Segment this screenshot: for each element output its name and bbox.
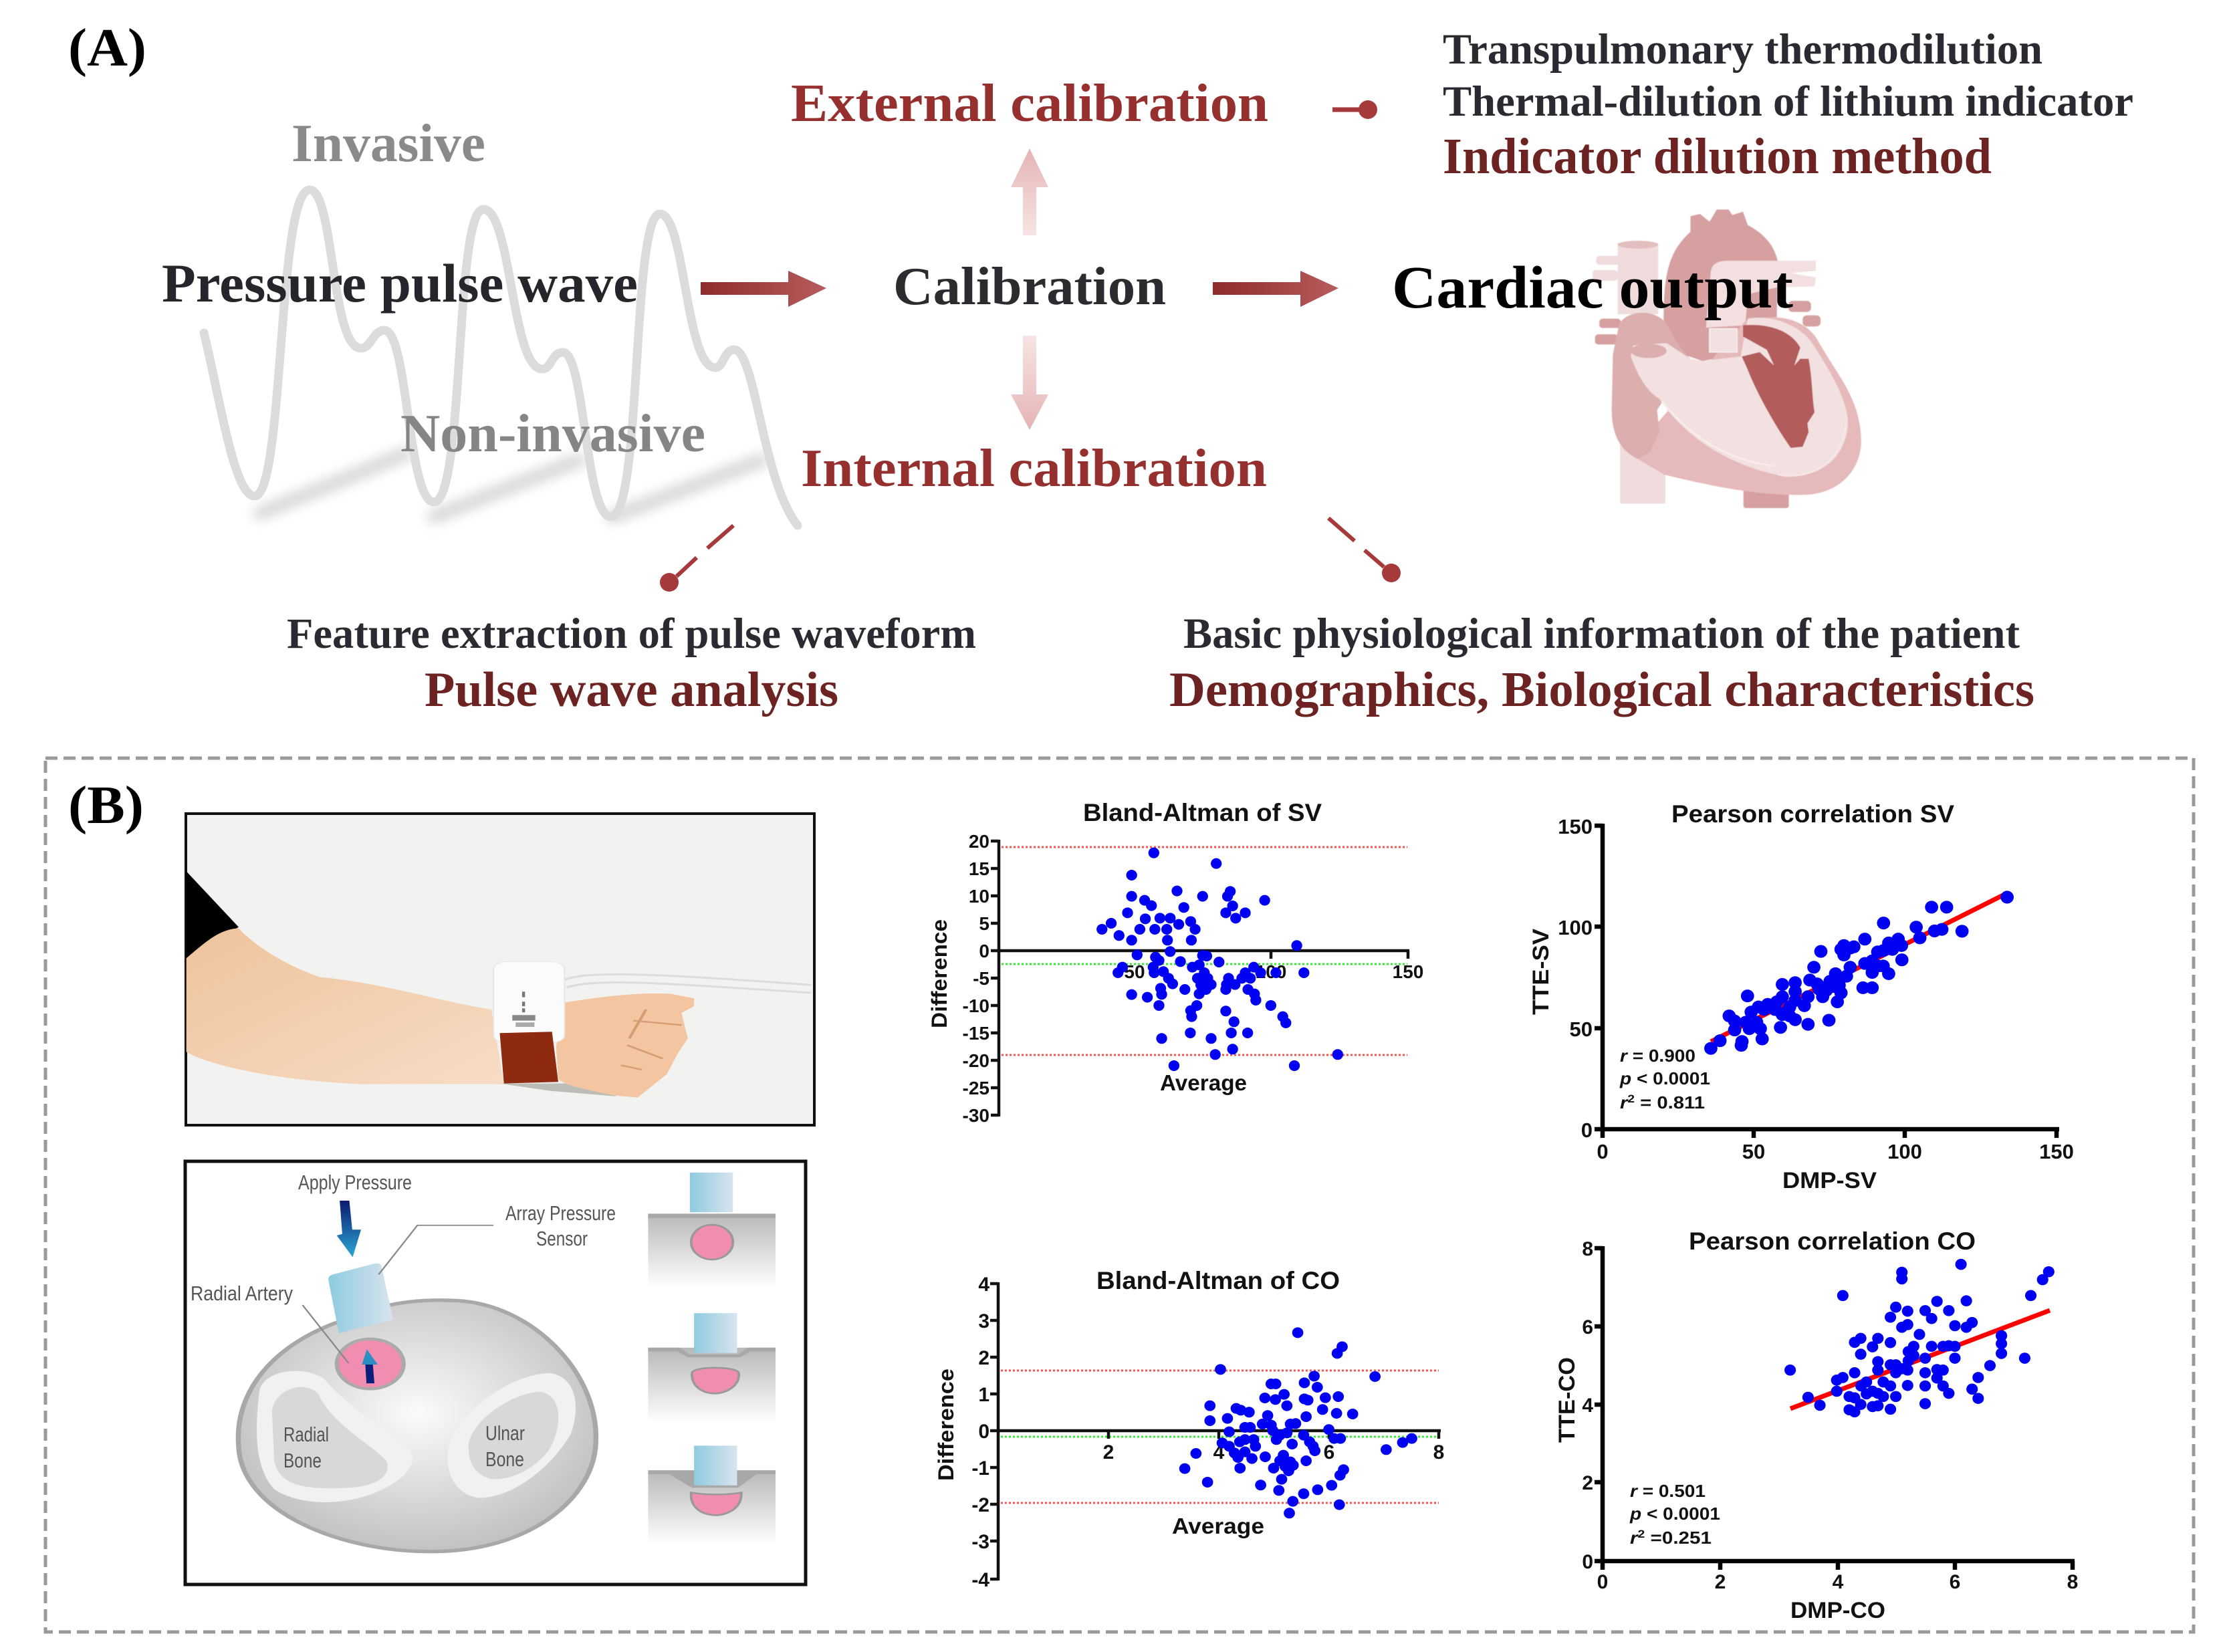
chart: Pearson correlation SV xyxy=(1528,800,2074,1193)
statistics annotation xyxy=(1629,1481,1720,1548)
x axis title: DMP-CO xyxy=(1790,1598,1885,1623)
statistics annotation: p < 0.0001 xyxy=(1629,1504,1720,1524)
heading: cardiac output: Cardiac output xyxy=(1392,255,1793,321)
x axis title: DMP-SV xyxy=(1782,1168,1877,1193)
statistics annotation: r = 0.501 xyxy=(1630,1481,1706,1501)
regression line xyxy=(1711,895,2004,1042)
y axis with ticks: 5 xyxy=(979,913,989,934)
axes with ticks: 4 xyxy=(1582,1395,1593,1417)
y axis title: Difference xyxy=(934,1369,958,1481)
x axis with ticks: 8 xyxy=(1433,1441,1444,1463)
y axis title: Difference xyxy=(927,919,951,1028)
text: thermal-dilution of lithium indicator: Thermal-dilution of lithium indicator xyxy=(1443,78,2133,126)
x axis with ticks: 2 xyxy=(1103,1441,1114,1463)
arrow: up to external calibration xyxy=(1011,148,1048,235)
connector: internal calibration to pulse wave analysis xyxy=(660,525,733,592)
labels: ulnar: Ulnar xyxy=(485,1421,525,1445)
axes with ticks: 100 xyxy=(1887,1140,1922,1163)
y axis with ticks xyxy=(971,1274,998,1591)
y axis with ticks: 0 xyxy=(979,941,989,961)
axes with ticks xyxy=(1558,815,2074,1163)
chart: Bland-Altman of SV xyxy=(927,799,1423,1126)
compression state 1 xyxy=(648,1173,776,1288)
axes with ticks: 50 xyxy=(1570,1018,1593,1041)
y axis with ticks: -25 xyxy=(963,1078,989,1098)
y axis with ticks: -20 xyxy=(963,1050,989,1071)
compression state 2 xyxy=(648,1313,776,1423)
label: pressure pulse wave: Pressure pulse wave xyxy=(162,253,638,314)
statistics annotation: r xyxy=(1630,1528,1639,1548)
y axis title: TTE-CO xyxy=(1554,1357,1580,1443)
scatter points xyxy=(1179,1327,1417,1518)
arrow: pulse wave to calibration xyxy=(701,271,826,307)
y axis title: TTE-SV xyxy=(1528,929,1554,1015)
wrist cross-section xyxy=(238,1300,596,1552)
labels: radial artery: Radial Artery xyxy=(191,1282,293,1305)
label: invasive: Invasive xyxy=(291,114,485,173)
y axis with ticks: -15 xyxy=(963,1023,989,1044)
x axis with ticks: 50 xyxy=(1124,961,1145,982)
x axis with ticks xyxy=(999,951,1423,982)
y axis with ticks: -10 xyxy=(963,995,989,1016)
diagram: applanation tonometry cross-section xyxy=(185,1161,806,1584)
chart title: Pearson correlation SV xyxy=(1671,800,1954,828)
statistics annotation: r xyxy=(1620,1092,1629,1112)
limit and mean lines xyxy=(1001,1371,1439,1503)
y axis with ticks xyxy=(963,831,999,1126)
labels: array pressure: Array Pressure xyxy=(505,1201,616,1225)
text: demographics, biological characteristics: Demographics, Biological characteristics xyxy=(1169,663,2034,717)
y axis with ticks: 1 xyxy=(978,1384,989,1406)
heading: internal calibration: Internal calibration xyxy=(801,439,1267,498)
pulse waveform graphic xyxy=(204,190,798,525)
scatter points xyxy=(1096,848,1343,1071)
label: calibration: Calibration xyxy=(893,257,1166,316)
axes with ticks: 0 xyxy=(1597,1571,1608,1593)
axes with ticks: 8 xyxy=(1582,1238,1593,1260)
regression line xyxy=(1790,1310,2050,1409)
labels: radial: Radial xyxy=(283,1423,329,1446)
photo: wrist-worn sensor on arm xyxy=(186,814,814,1125)
axes with ticks: 150 xyxy=(1558,815,1593,838)
x axis with ticks: 150 xyxy=(1393,961,1423,982)
radial artery xyxy=(337,1339,404,1389)
axes with ticks: 50 xyxy=(1742,1140,1765,1163)
panel label B: (B) xyxy=(68,776,144,835)
y axis with ticks: 10 xyxy=(969,886,989,907)
heading: external calibration: External calibration xyxy=(791,74,1268,133)
icon: heart xyxy=(1593,209,1861,508)
statistics annotation: = 0.811 xyxy=(1635,1092,1705,1112)
axes with ticks: 2 xyxy=(1715,1571,1726,1593)
scatter points xyxy=(1784,1259,2055,1417)
radial bone xyxy=(257,1371,413,1502)
connector: internal calibration to demographics xyxy=(1328,518,1401,582)
axes with ticks: 150 xyxy=(2039,1140,2074,1163)
y axis with ticks: -1 xyxy=(971,1457,989,1480)
y axis with ticks: 15 xyxy=(969,858,989,879)
text: transpulmonary thermodilution: Transpulmonary thermodilution xyxy=(1443,25,2042,74)
statistics annotation: 2 xyxy=(1627,1092,1635,1105)
connector: external calibration xyxy=(1332,100,1377,119)
axes with ticks: 100 xyxy=(1558,916,1593,939)
text: feature extraction of pulse waveform: Feature extraction of pulse waveform xyxy=(287,610,976,658)
ulnar bone xyxy=(447,1373,576,1498)
chart: Bland-Altman of CO xyxy=(934,1267,1444,1591)
x axis with ticks: 100 xyxy=(1256,961,1286,982)
y axis with ticks: -30 xyxy=(963,1105,989,1126)
panel label A: (A) xyxy=(68,19,146,78)
axes with ticks: 0 xyxy=(1597,1140,1609,1163)
label: non-invasive: Non-invasive xyxy=(400,404,705,463)
text: basic physiological information: Basic physiological information of the patient xyxy=(1183,610,2020,658)
y axis with ticks: 2 xyxy=(978,1347,989,1369)
y axis with ticks: 3 xyxy=(978,1310,989,1332)
statistics annotation: =0.251 xyxy=(1645,1528,1712,1548)
axes with ticks: 6 xyxy=(1950,1571,1960,1593)
labels: sensor: Sensor xyxy=(536,1227,588,1250)
y axis with ticks: -3 xyxy=(971,1531,989,1553)
arrow: calibration to cardiac output xyxy=(1213,271,1338,307)
scatter points xyxy=(1704,891,2014,1055)
chart title: Pearson correlation CO xyxy=(1689,1227,1976,1255)
array pressure sensor xyxy=(328,1264,393,1333)
axes with ticks: 2 xyxy=(1582,1472,1593,1494)
labels: radial bone: Bone xyxy=(283,1449,322,1472)
panel A: calibration flow xyxy=(68,19,2133,717)
x axis title: Average xyxy=(1172,1514,1264,1538)
labels: apply pressure: Apply Pressure xyxy=(298,1171,412,1194)
y axis with ticks: -4 xyxy=(971,1569,989,1591)
axes with ticks: 0 xyxy=(1581,1118,1593,1142)
statistics annotation xyxy=(1619,1046,1710,1112)
x axis title: Average xyxy=(1160,1070,1247,1095)
axes with ticks: 0 xyxy=(1582,1551,1593,1573)
statistics annotation: p < 0.0001 xyxy=(1619,1068,1710,1088)
dashed panel border xyxy=(45,758,2194,1632)
limit and mean lines xyxy=(1002,847,1407,1055)
y axis with ticks: 4 xyxy=(978,1274,989,1296)
labels: ulnar bone: Bone xyxy=(485,1447,524,1471)
statistics annotation: 2 xyxy=(1638,1528,1645,1540)
x axis with ticks: 6 xyxy=(1324,1441,1334,1463)
axes with ticks xyxy=(1582,1238,2078,1593)
y axis with ticks: -5 xyxy=(973,968,989,989)
text: indicator dilution method: Indicator dilution method xyxy=(1443,128,1992,185)
statistics annotation: r = 0.900 xyxy=(1620,1046,1695,1066)
y axis with ticks: 0 xyxy=(978,1421,989,1443)
arrow: down to internal calibration xyxy=(1011,336,1048,430)
chart: Pearson correlation CO xyxy=(1554,1227,2078,1623)
axes with ticks: 8 xyxy=(2067,1571,2078,1593)
text: pulse wave analysis: Pulse wave analysis xyxy=(425,663,838,717)
panel B: validation xyxy=(45,758,2194,1632)
axes with ticks: 6 xyxy=(1582,1316,1593,1338)
compression state 3 xyxy=(648,1445,776,1544)
chart title: Bland-Altman of SV xyxy=(1083,799,1322,826)
axes with ticks: 4 xyxy=(1833,1571,1844,1593)
y axis with ticks: -2 xyxy=(971,1494,989,1516)
x axis with ticks: 4 xyxy=(1213,1441,1225,1463)
y axis with ticks: 20 xyxy=(969,831,989,852)
chart title: Bland-Altman of CO xyxy=(1096,1267,1340,1294)
x axis with ticks xyxy=(998,1431,1444,1463)
arrow: apply pressure xyxy=(337,1201,361,1257)
